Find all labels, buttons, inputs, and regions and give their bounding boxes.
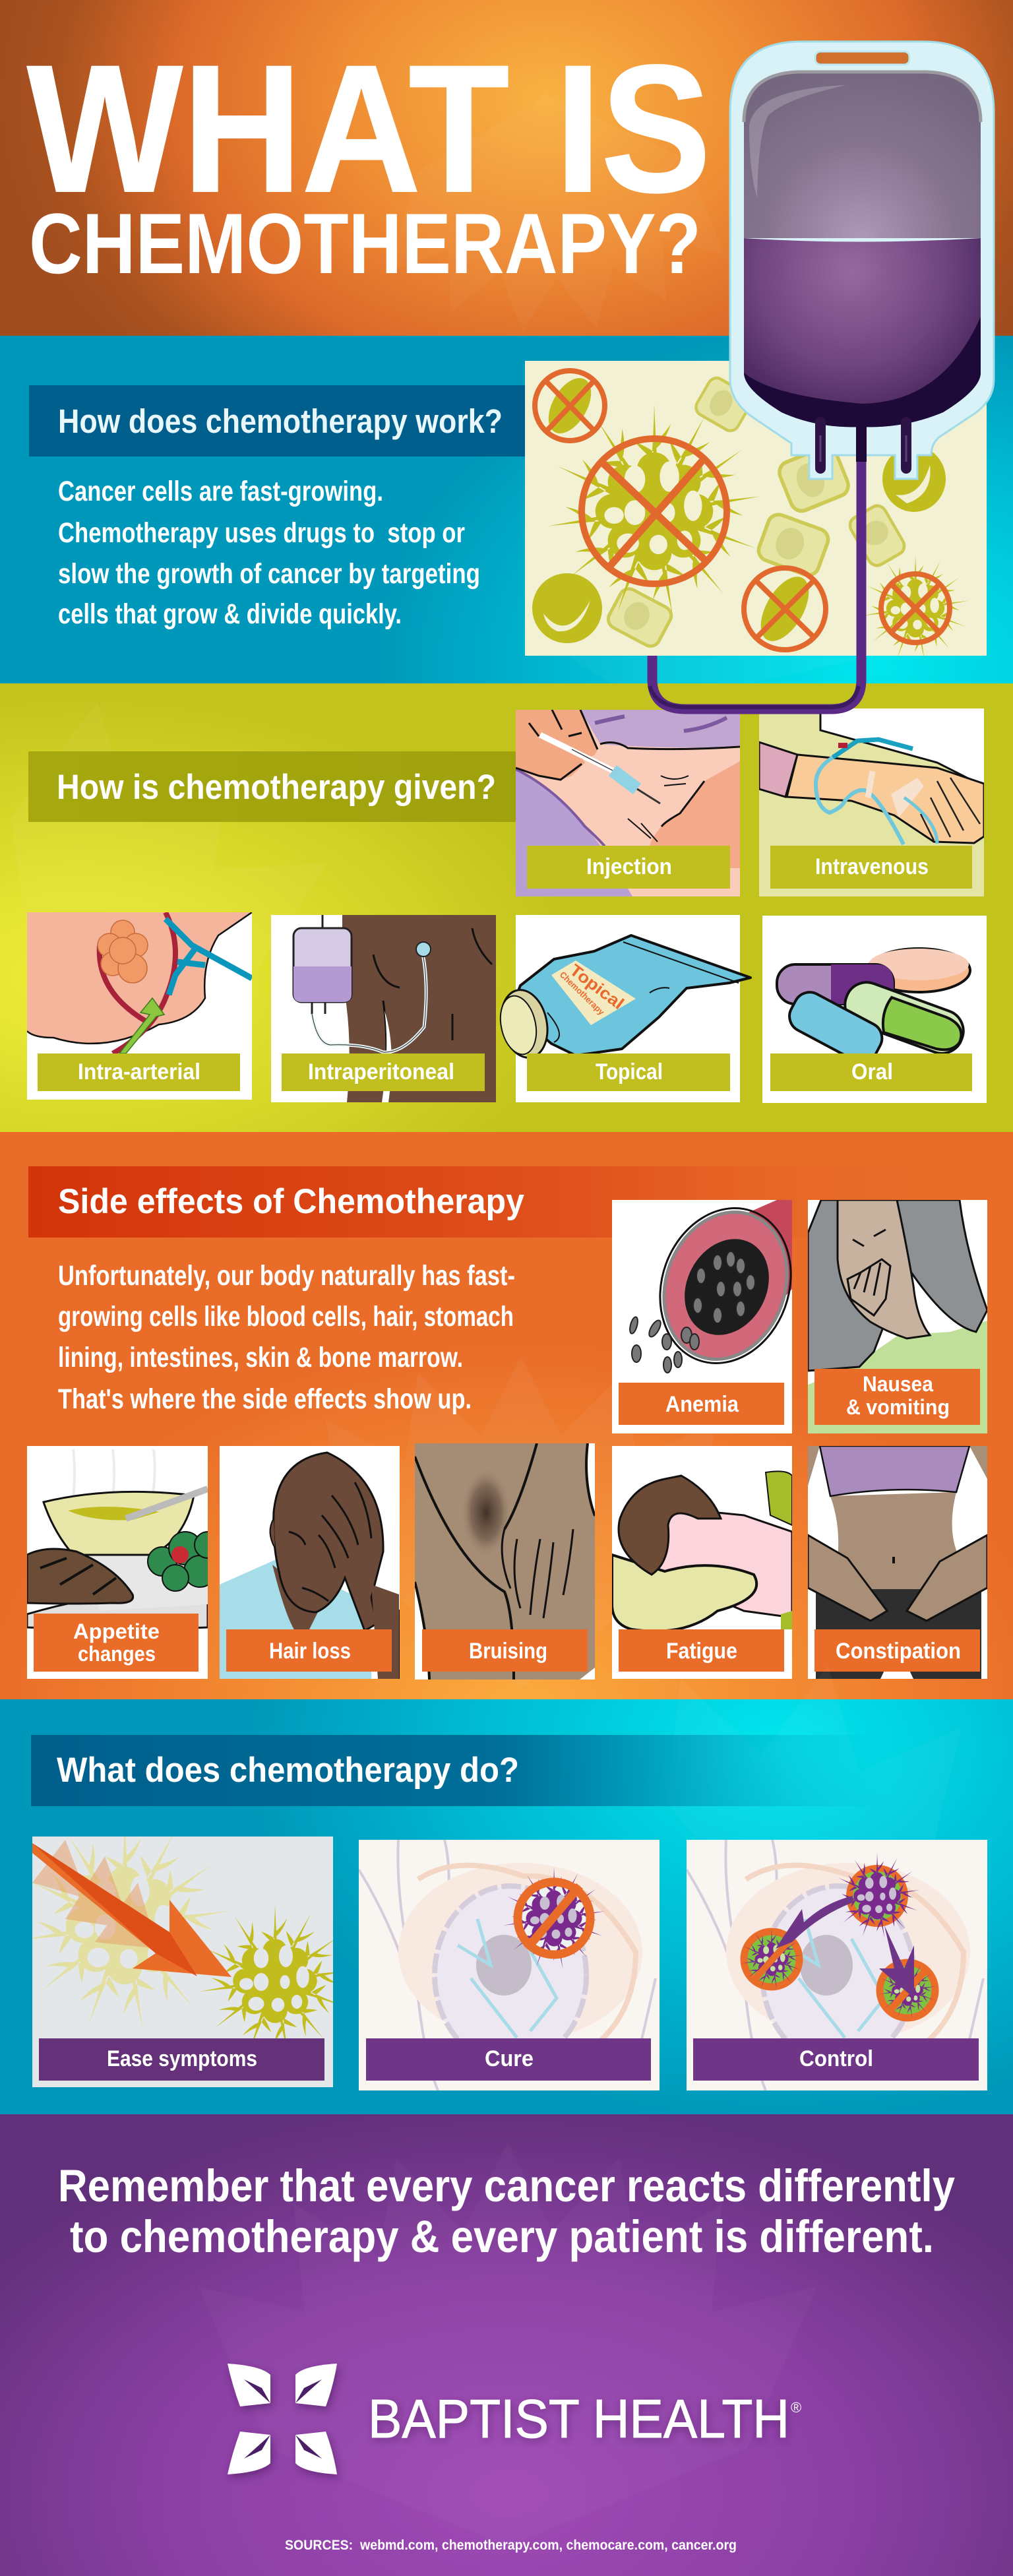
label: cure xyxy=(366,2038,651,2081)
card: hair loss xyxy=(220,1446,400,1679)
card: injection xyxy=(516,710,740,896)
label: nausea and vomiting: & vomiting xyxy=(846,1395,950,1419)
label: constipation xyxy=(814,1629,980,1672)
card: appetite changes xyxy=(27,1446,221,1679)
illustration: cancer cells being stopped xyxy=(525,361,987,662)
title: chemotherapy: CHEMOTHERAPY? xyxy=(29,195,701,292)
card: fatigue xyxy=(612,1446,792,1679)
illustration: breast tissue with spreading cells xyxy=(687,1840,987,2090)
panel: closing message and logo xyxy=(0,2114,1013,2576)
label: nausea and vomiting: Nausea xyxy=(863,1372,933,1396)
card: bruising xyxy=(415,1443,595,1680)
label: appetite changes xyxy=(34,1614,199,1672)
icon: crossed large cancer cell xyxy=(545,404,763,620)
text block: side effects explanation: lining, intestines, skin & bone marrow. xyxy=(58,1342,463,1373)
heading bar: how is chemotherapy given: How is chemotherapy given? xyxy=(57,768,496,807)
illustration: topical tube xyxy=(495,935,751,1062)
illustration: topical tube: Chemotherapy xyxy=(558,970,607,1017)
label: injection: Injection xyxy=(586,854,672,879)
card: intra-arterial xyxy=(27,912,252,1100)
card: constipation xyxy=(808,1446,987,1679)
label: hair loss: Hair loss xyxy=(269,1639,351,1664)
bag medicine xyxy=(744,72,981,468)
text block: side effects explanation xyxy=(58,1260,515,1415)
title: what is: WHAT IS xyxy=(27,28,711,230)
heading bar: what does chemotherapy do: What does chemotherapy do? xyxy=(57,1751,519,1790)
panel: how is chemotherapy given xyxy=(0,683,1013,1133)
label: nausea and vomiting xyxy=(814,1369,980,1425)
label: topical xyxy=(527,1053,730,1091)
label: ease symptoms xyxy=(39,2038,324,2081)
illustration: breast tissue with crossed cell xyxy=(359,1840,660,2090)
heading bar: what does chemotherapy do xyxy=(31,1735,888,1806)
label: bruising xyxy=(422,1629,588,1672)
illustration: bruised thigh xyxy=(415,1443,595,1680)
illustration: artery and tumor xyxy=(27,912,252,1100)
text block: explanation: Cancer cells are fast-growing. xyxy=(58,476,383,507)
icon: crossed cancer cell bottom right xyxy=(861,555,969,662)
card: anemia xyxy=(612,1189,812,1433)
label: intravenous: Intravenous xyxy=(815,854,929,879)
text block: explanation: Chemotherapy uses drugs to stop or xyxy=(58,517,465,549)
text block: side effects explanation: growing cells like blood cells, hair, stomach xyxy=(58,1301,514,1333)
icon: normal cells xyxy=(532,375,946,650)
illustration: intravenous arm xyxy=(759,708,984,896)
illustration: woman covering mouth xyxy=(808,1200,987,1433)
illustration: blood vessel xyxy=(612,1200,792,1433)
bag outer plastic xyxy=(730,42,994,479)
illustration: topical tube: Topical xyxy=(566,960,627,1013)
label: oral: Oral xyxy=(851,1059,893,1084)
text block: explanation xyxy=(58,476,480,630)
label: cure: Cure xyxy=(485,2046,534,2071)
illustration: injection xyxy=(516,710,740,896)
illustration: person sleeping on pillow xyxy=(612,1446,792,1679)
label: control xyxy=(693,2038,979,2081)
text block: explanation: cells that grow & divide quickly. xyxy=(58,598,402,630)
wordmark: baptist health: ® xyxy=(791,2399,801,2416)
text block: sources: SOURCES: webmd.com, chemotherapy.com, chemocare.com, cancer.org xyxy=(285,2538,737,2553)
card: control xyxy=(687,1840,987,2090)
label: intraperitoneal xyxy=(282,1053,485,1091)
label: appetite changes: Appetite xyxy=(73,1619,160,1643)
card: intravenous xyxy=(759,708,984,896)
logo: baptist health xyxy=(228,2364,801,2478)
label: oral xyxy=(770,1053,972,1091)
label: appetite changes: changes xyxy=(78,1642,156,1666)
icon: crossed oval cell top left xyxy=(535,371,605,441)
label: intra-arterial xyxy=(38,1053,240,1091)
label: anemia xyxy=(619,1383,784,1425)
text block: side effects explanation: Unfortunately, our body naturally has fast- xyxy=(58,1260,515,1292)
heading bar: side effects xyxy=(28,1166,952,1238)
illustration: arrow hitting cancer cell xyxy=(32,1837,333,2087)
heading bar: how does chemotherapy work: How does chemotherapy work? xyxy=(58,402,503,440)
label: topical: Topical xyxy=(596,1059,663,1084)
icon: four petals xyxy=(228,2364,339,2478)
label: intravenous xyxy=(770,846,972,889)
text block: side effects explanation: That's where the side effects show up. xyxy=(58,1383,472,1415)
panel: side effects xyxy=(0,1132,1013,1727)
label: fatigue: Fatigue xyxy=(666,1639,737,1664)
card: oral xyxy=(762,916,987,1103)
label: bruising: Bruising xyxy=(469,1639,547,1664)
illustration: intraperitoneal body and bag xyxy=(271,915,496,1102)
label: intra-arterial: Intra-arterial xyxy=(78,1059,200,1084)
wordmark: baptist health: BAPTIST HEALTH xyxy=(370,2391,789,2452)
icon: crossed oval cell bottom xyxy=(744,568,826,650)
label: injection xyxy=(527,846,730,889)
label: constipation: Constipation xyxy=(836,1639,961,1664)
card: ease symptoms xyxy=(16,1818,353,2087)
panel: how does chemotherapy work xyxy=(0,336,1013,724)
text block: closing message xyxy=(58,2160,955,2262)
card: cure xyxy=(359,1840,660,2090)
card: nausea and vomiting xyxy=(808,1200,987,1433)
tube loop xyxy=(650,422,861,709)
label: intraperitoneal: Intraperitoneal xyxy=(308,1059,454,1084)
icon: iv chemo bag with tube xyxy=(650,42,994,709)
panel: hero header xyxy=(0,0,1013,338)
heading bar: how is chemotherapy given xyxy=(28,751,516,822)
illustration: abdomen with hands xyxy=(808,1446,987,1679)
panel: what does chemotherapy do xyxy=(0,1656,1013,2115)
label: hair loss xyxy=(226,1629,392,1672)
heading bar: side effects: Side effects of Chemotherapy xyxy=(58,1182,524,1221)
wordmark: baptist health: BAPTIST HEALTH xyxy=(368,2388,789,2449)
label: anemia: Anemia xyxy=(665,1392,739,1417)
illustration: soup bread and salad xyxy=(27,1446,208,1679)
label: control: Control xyxy=(799,2046,873,2071)
text block: explanation: slow the growth of cancer by targeting xyxy=(58,558,480,590)
heading bar: how does chemotherapy work xyxy=(29,385,525,456)
label: fatigue xyxy=(619,1629,784,1672)
label: ease symptoms: Ease symptoms xyxy=(107,2046,257,2071)
illustration: bald man holding head xyxy=(220,1446,400,1679)
card: topical xyxy=(495,915,751,1102)
card: intraperitoneal xyxy=(271,915,496,1102)
illustration: pills xyxy=(777,949,970,1068)
text block: closing message: to chemotherapy & every patient is different. xyxy=(70,2211,934,2262)
